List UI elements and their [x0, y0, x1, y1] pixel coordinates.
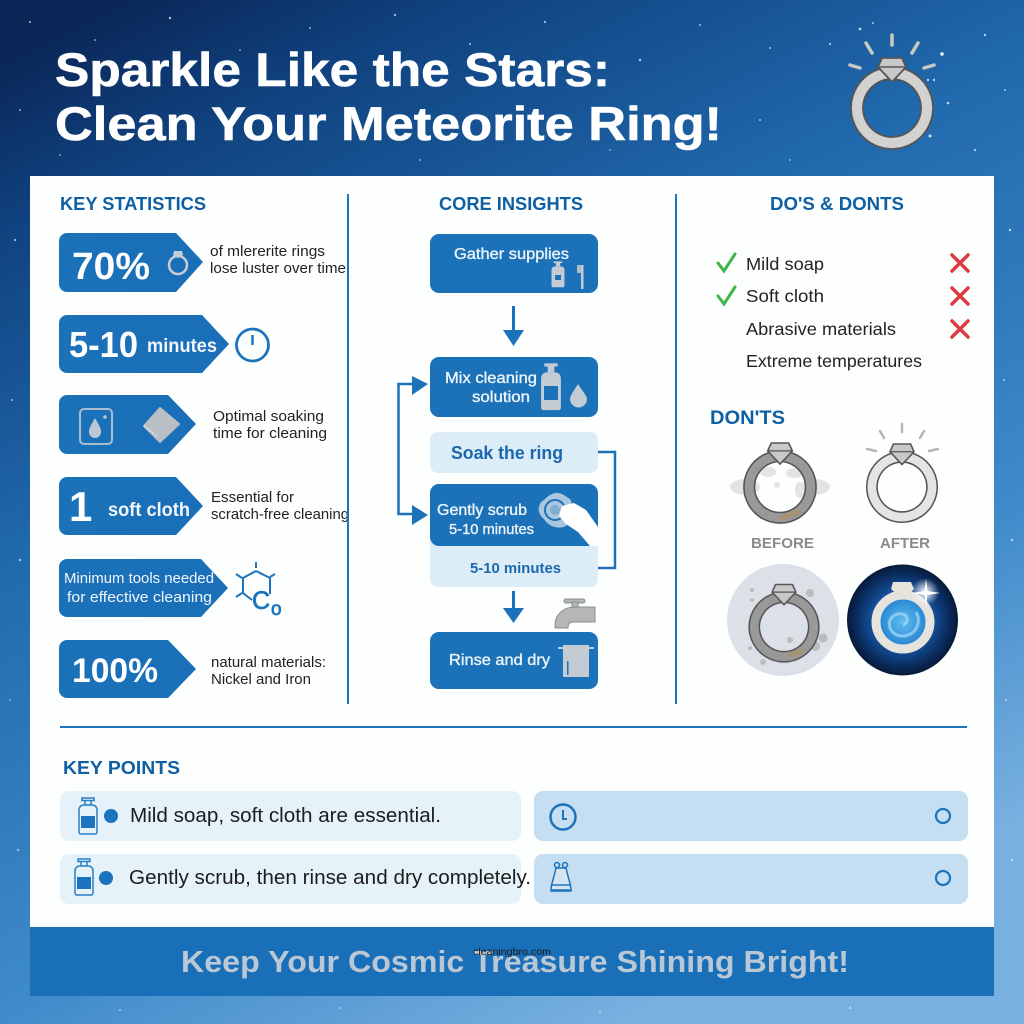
stat: 1 soft cloth [59, 477, 349, 535]
key point row 1 [60, 791, 968, 841]
arrow: down 1 [503, 306, 524, 346]
icon: molecule: C [252, 587, 270, 615]
step: soak the ring: Soak the ring [451, 443, 563, 463]
icon: faucet [555, 599, 595, 628]
step: soak the ring [430, 432, 598, 473]
key point row 2: Gently scrub, then rinse and dry completely. [129, 867, 531, 889]
step: gently scrub: Gently scrub [437, 502, 527, 519]
list text: Mild soap [746, 254, 824, 274]
arrow: down 2 [503, 591, 524, 623]
label: after: AFTER [880, 535, 930, 552]
list text: Abrasive materials [746, 319, 896, 339]
step: mix cleaning solution: Mix cleaning [445, 370, 537, 387]
stat: 1 soft cloth: soft cloth [108, 500, 190, 521]
icon: sparkling ring in header [850, 35, 934, 149]
stat: 70 percent: 70% [72, 246, 150, 288]
illustration: dirty ring disc [727, 564, 839, 676]
stat: 70 percent: lose luster over time [210, 260, 346, 277]
icon: clock [236, 329, 268, 361]
stat: 70 percent: of mlererite rings [210, 243, 325, 260]
stat: 100 percent: 100% [72, 652, 158, 690]
panel: main white card [30, 176, 994, 928]
stat: 5-10 minutes: minutes [147, 336, 217, 357]
illustration: cosmic ring disc [847, 564, 958, 676]
stat: 70 percent [59, 233, 346, 292]
panel: do's and don'ts [710, 194, 968, 676]
list text: Soft cloth [746, 286, 824, 306]
stat: 100 percent: Nickel and Iron [211, 671, 311, 688]
step: time note panel: 5-10 minutes [470, 560, 561, 577]
heading: core insights: CORE INSIGHTS [439, 194, 583, 214]
stat: soaking time: time for cleaning [213, 425, 327, 442]
step: gather supplies: Gather supplies [454, 246, 569, 263]
icon: molecule [236, 562, 282, 620]
watermark: cleaningbro.com [473, 947, 551, 958]
panel: key statistics [59, 194, 349, 698]
heading: don'ts: DON'TS [710, 408, 785, 429]
connector: right bracket [598, 452, 615, 568]
step: gently scrub: 5-10 minutes [449, 521, 534, 538]
label: before: BEFORE [751, 535, 814, 552]
heading: key points: KEY POINTS [63, 758, 180, 778]
title [55, 43, 722, 150]
step: time note panel [430, 540, 598, 587]
step: gather supplies [430, 234, 598, 293]
step: rinse and dry: Rinse and dry [449, 652, 550, 669]
stat: 5-10 minutes [59, 315, 268, 373]
stat: minimum tools: Minimum tools needed [64, 571, 214, 587]
footer banner: Keep Your Cosmic Treasure Shining Bright! [181, 944, 849, 979]
stat: 1 soft cloth: Essential for [211, 489, 294, 506]
footer banner [30, 927, 994, 996]
step: gently scrub [430, 484, 598, 546]
stat: minimum tools [59, 559, 282, 620]
panel: key points [60, 758, 968, 904]
stat: 5-10 minutes: 5-10 [69, 324, 138, 365]
icon: molecule: o [271, 599, 282, 620]
stat: 100 percent: natural materials: [211, 654, 326, 671]
illustration: ring before [730, 443, 830, 523]
connector: left loop arrow [398, 376, 428, 525]
heading: key statistics: KEY STATISTICS [60, 194, 206, 214]
stat: soaking time [59, 395, 327, 454]
illustration: ring after [867, 424, 938, 522]
stat: minimum tools: for effective cleaning [67, 590, 212, 606]
step: mix cleaning solution [430, 357, 598, 417]
stat: 1 soft cloth: scratch-free cleaning [211, 506, 349, 523]
heading: do's and donts: DO'S & DONTS [770, 194, 904, 214]
stat: soaking time: Optimal soaking [213, 408, 324, 425]
icons: red crosses [952, 255, 968, 337]
title: Clean Your Meteorite Ring! [55, 97, 722, 150]
list text: Extreme temperatures [746, 351, 922, 371]
key point row 1: Mild soap, soft cloth are essential. [130, 805, 441, 827]
panel: core insights flow [398, 194, 615, 689]
stat: 100 percent [59, 640, 326, 698]
icons: green checks [718, 254, 735, 304]
key point row 2 [60, 854, 968, 904]
title: Sparkle Like the Stars: [55, 43, 610, 96]
step: rinse and dry [430, 632, 598, 689]
step: mix cleaning solution: solution [472, 389, 530, 406]
list text [746, 254, 922, 371]
stat: 1 soft cloth: 1 [69, 483, 92, 530]
